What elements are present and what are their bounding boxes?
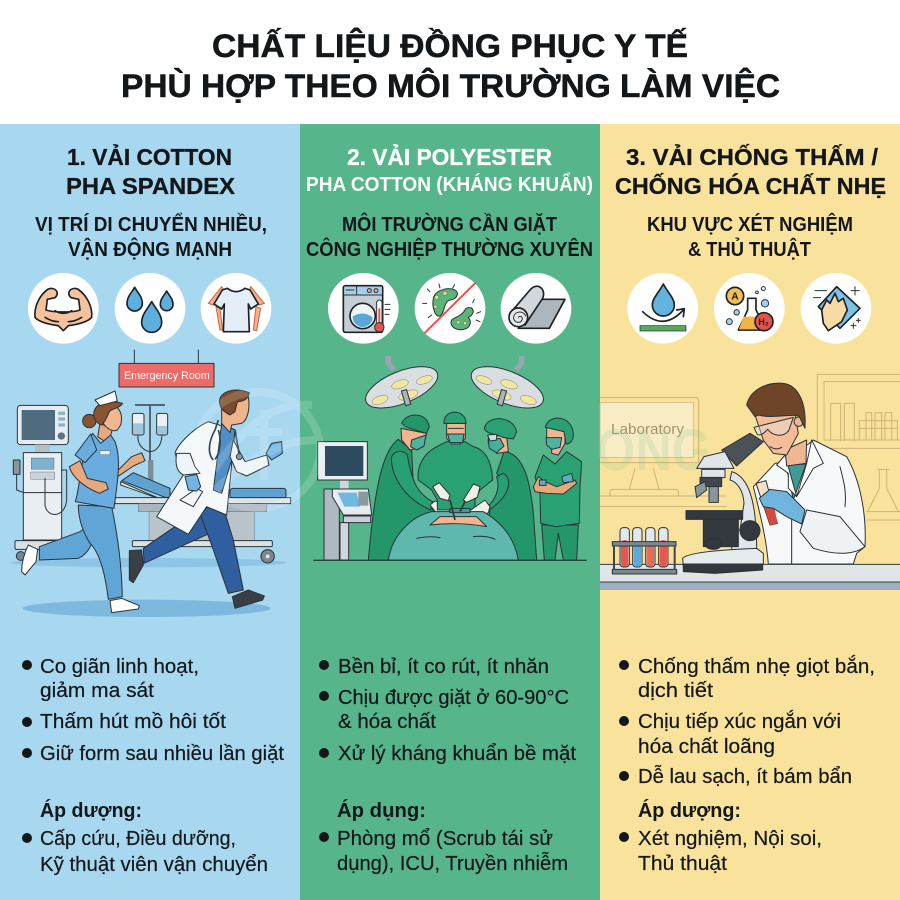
heading: polyester cotton: 2. VẢI POLYESTER bbox=[347, 142, 552, 170]
sign: emergency room bbox=[119, 350, 214, 387]
test tube rack bbox=[612, 528, 677, 574]
bullet list: cotton benefits: Thấm hút mồ hôi tốt bbox=[40, 711, 226, 733]
bullet list: cotton benefits: giảm ma sát bbox=[40, 680, 154, 702]
icons: waterproof properties bbox=[627, 273, 871, 344]
patient under drape bbox=[388, 500, 518, 560]
application: waterproof: Thủ thuật bbox=[638, 853, 727, 875]
bullet list: waterproof benefits: dịch tiết bbox=[638, 680, 713, 702]
sign: emergency room: Emergency Room bbox=[124, 370, 210, 382]
icon: water repellent drop bbox=[640, 284, 686, 331]
icon: fabric roll bbox=[509, 286, 565, 328]
bullet list: polyester benefits: Bền bỉ, ít co rút, ít nhăn bbox=[338, 656, 549, 678]
figure: doctor running bbox=[129, 390, 282, 608]
figure: left surgeon bbox=[368, 415, 450, 560]
icon: stretch t-shirt bbox=[208, 287, 264, 332]
subheading: industrial laundering bbox=[306, 212, 593, 261]
application: cotton: Kỹ thuật viên vận chuyển bbox=[40, 854, 268, 876]
heading: waterproof fabric: 3. VẢI CHỐNG THẤM / bbox=[626, 142, 879, 170]
icon: washing machine with thermometer bbox=[343, 286, 390, 332]
application: waterproof bbox=[619, 799, 822, 875]
title bbox=[121, 28, 780, 104]
figure: nurse running bbox=[22, 391, 145, 613]
subheading: high movement roles: VẬN ĐỘNG MẠNH bbox=[68, 237, 232, 261]
bullet list: cotton benefits bbox=[22, 656, 284, 765]
floor shadows bbox=[10, 558, 287, 617]
subheading: labs and procedures: KHU VỰC XÉT NGHIỆM bbox=[647, 212, 853, 236]
bullet list: waterproof benefits: Chịu tiếp xúc ngắn với bbox=[638, 710, 841, 733]
application: cotton bbox=[22, 799, 268, 876]
icon: chemical flask: A bbox=[731, 292, 739, 303]
application: cotton: Cấp cứu, Điều dưỡng, bbox=[40, 828, 236, 850]
panel: cotton spandex bbox=[0, 124, 300, 900]
ventilator machine bbox=[13, 405, 68, 560]
heading: cotton spandex: 1. VẢI COTTON bbox=[67, 142, 232, 170]
icon: wiping hand bbox=[813, 287, 860, 331]
heading: cotton spandex bbox=[66, 142, 236, 199]
subheading: industrial laundering: MÔI TRƯỜNG CẦN GIẶT bbox=[342, 212, 557, 236]
bullet list: polyester benefits bbox=[319, 656, 576, 765]
application: waterproof: Áp dượng: bbox=[638, 799, 741, 822]
illustration: operating room bbox=[313, 356, 587, 560]
iv stand bbox=[132, 405, 168, 482]
heading: cotton spandex: PHA SPANDEX bbox=[66, 173, 236, 199]
application: polyester: dụng), ICU, Truyền nhiễm bbox=[337, 852, 568, 875]
heading: waterproof fabric bbox=[615, 142, 886, 199]
bullet list: waterproof benefits: Chống thấm nhẹ giọt bắn, bbox=[638, 655, 875, 678]
laboratory wall monitor bbox=[600, 397, 727, 507]
illustration: emergency room running staff bbox=[10, 350, 291, 617]
application: waterproof: Xét nghiệm, Nội soi, bbox=[638, 828, 822, 850]
bullet list: polyester benefits: & hóa chất bbox=[338, 711, 436, 733]
illustration: laboratory bbox=[596, 374, 900, 590]
icons: cotton properties bbox=[28, 273, 271, 344]
bullet list: polyester benefits: Chịu được giặt ở 60-90°C bbox=[338, 687, 569, 709]
figure: lab scientist bbox=[747, 383, 865, 564]
panel: waterproof fabric bbox=[596, 124, 900, 900]
subheading: labs and procedures: & THỦ THUẬT bbox=[688, 237, 811, 261]
lab background shelves and flask bbox=[817, 374, 900, 520]
hospital bed bbox=[115, 473, 291, 563]
icon: antibacterial no-germ bbox=[423, 283, 481, 333]
surgical lights bbox=[360, 356, 549, 417]
bullet list: waterproof benefits: Dễ lau sạch, ít bám bẩn bbox=[638, 765, 852, 788]
watermark: logo ring bbox=[196, 392, 320, 508]
subheading: high movement roles: VỊ TRÍ DI CHUYỂN NHIỀU, bbox=[35, 213, 267, 236]
heading: polyester cotton bbox=[306, 142, 593, 196]
bullet list: cotton benefits: Co giãn linh hoạt, bbox=[40, 656, 199, 678]
title: CHẤT LIỆU ĐỒNG PHỤC Y TẾ bbox=[212, 28, 688, 64]
icon: chemical flask: H₂ bbox=[758, 317, 769, 327]
heading: waterproof fabric: CHỐNG HÓA CHẤT NHẸ bbox=[615, 172, 886, 199]
floor line bbox=[313, 558, 587, 562]
panel: polyester cotton bbox=[300, 124, 600, 900]
watermark text: ONG bbox=[596, 418, 711, 483]
patient monitor cart bbox=[318, 442, 372, 560]
figure: right surgeon bbox=[466, 419, 537, 560]
icon: sweat drops bbox=[127, 287, 173, 332]
bullet list: polyester benefits: Xử lý kháng khuẩn bề mặt bbox=[338, 743, 576, 765]
figure: standing nurse bbox=[533, 418, 582, 560]
application: polyester: Áp dụng: bbox=[337, 799, 426, 822]
lab counter bbox=[600, 564, 900, 590]
icon: chemical flask bbox=[726, 287, 773, 331]
figure: center surgeon bbox=[418, 412, 493, 510]
laboratory wall monitor: Laboratory bbox=[611, 421, 685, 438]
bullet list: cotton benefits: Giữ form sau nhiều lần giặt bbox=[40, 743, 284, 765]
microscope bbox=[683, 433, 763, 573]
bullet list: waterproof benefits: hóa chất loãng bbox=[638, 736, 775, 758]
application: cotton: Áp dượng: bbox=[40, 799, 142, 822]
subheading: labs and procedures bbox=[647, 212, 853, 261]
icon: flexing muscles bbox=[35, 289, 92, 331]
bullet list: waterproof benefits bbox=[619, 655, 875, 788]
icons: polyester properties bbox=[328, 273, 571, 344]
application: polyester bbox=[319, 799, 568, 875]
subheading: high movement roles bbox=[35, 213, 267, 261]
heading: polyester cotton: PHA COTTON (KHÁNG KHUẨN) bbox=[306, 173, 593, 196]
subheading: industrial laundering: CÔNG NGHIỆP THƯỜNG XUYÊN bbox=[306, 237, 593, 261]
application: polyester: Phòng mổ (Scrub tái sử bbox=[337, 828, 553, 850]
title: PHÙ HỢP THEO MÔI TRƯỜNG LÀM VIỆC bbox=[121, 68, 780, 104]
